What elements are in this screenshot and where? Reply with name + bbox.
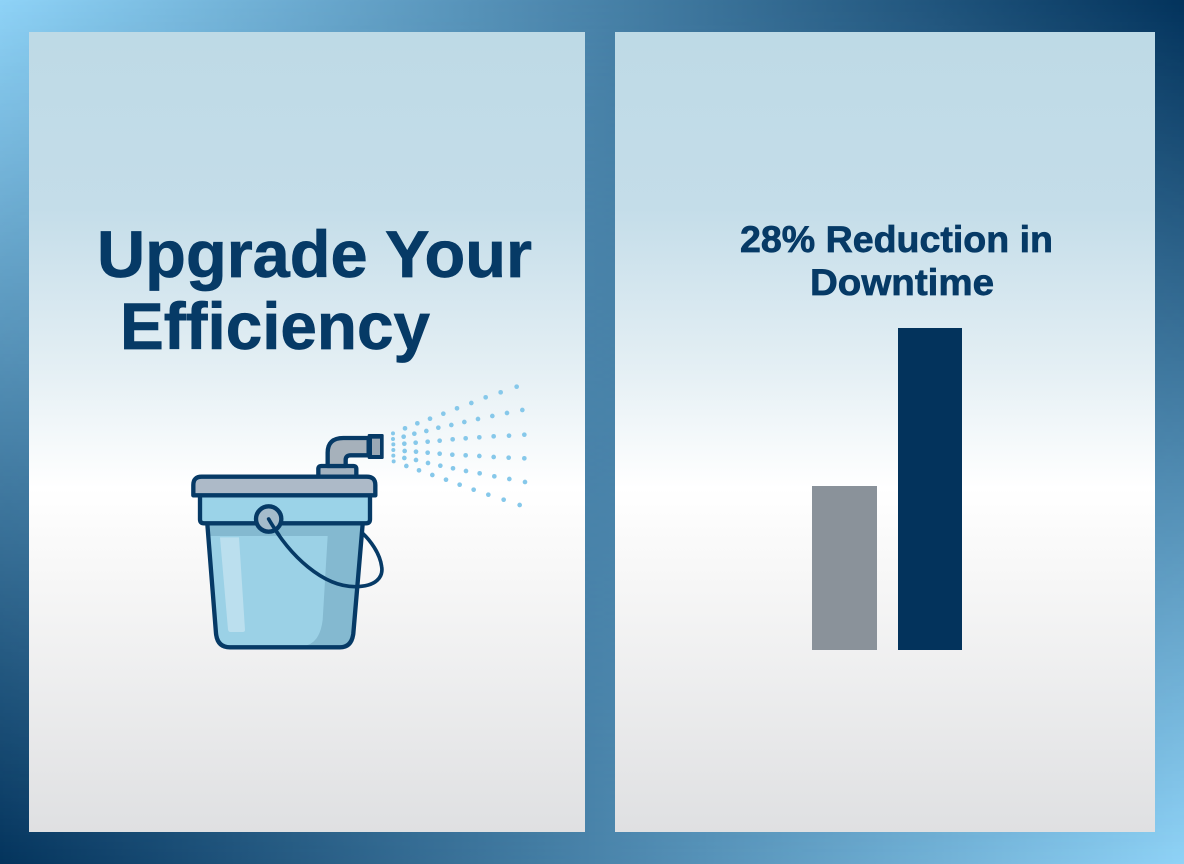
handle pivot [256,506,281,535]
heading: Upgrade Your Efficiency [97,217,532,363]
spout elbow pipe [328,438,369,466]
heading: Upgrade Your Efficiency: Efficiency [120,289,430,363]
heading: Upgrade Your Efficiency: Upgrade Your [97,217,532,291]
nozzle [368,434,384,459]
panel: upgrade your efficiency [29,32,585,832]
panel: downtime reduction [615,32,1155,832]
icon: bucket with spray nozzle [193,384,527,647]
bucket lid [193,477,375,495]
heading: 28% Reduction in Downtime: Downtime [810,262,994,303]
bar chart [812,328,962,650]
bucket handle [269,519,382,587]
heading: 28% Reduction in Downtime: 28% Reduction in [740,219,1053,260]
spout base [318,466,356,477]
bucket rim band [200,495,370,523]
bar: before [812,486,877,650]
water spray dots [391,384,527,507]
bar: after [898,328,962,650]
heading: 28% Reduction in Downtime [740,219,1053,303]
bucket body [207,524,363,647]
